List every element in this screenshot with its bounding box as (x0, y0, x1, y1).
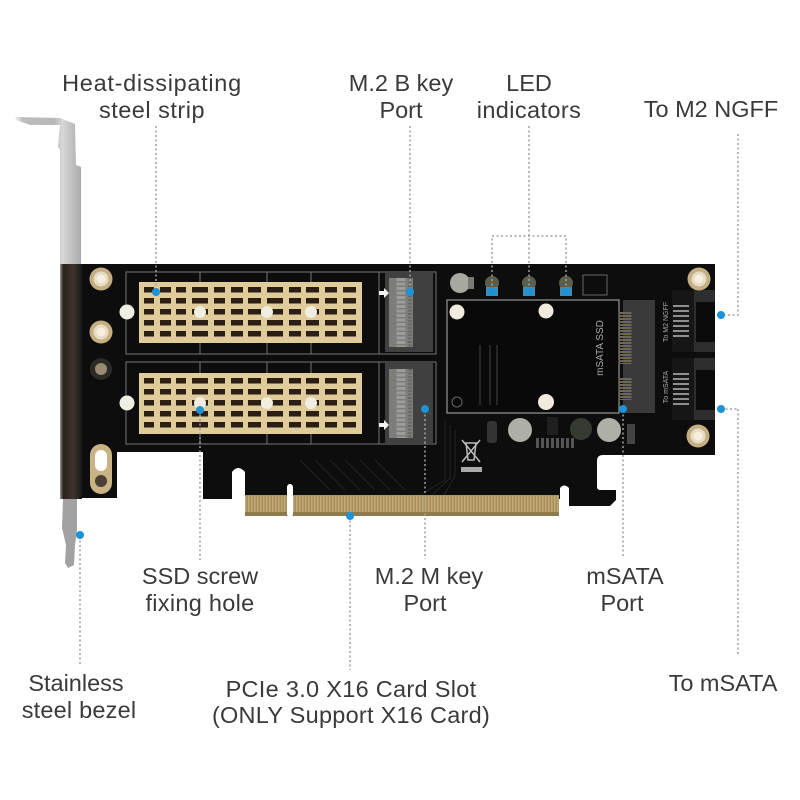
label: SSD screw fixing hole: SSD screw (142, 563, 259, 589)
SSD mounting outlines (126, 272, 436, 444)
label: M.2 B key port: Port (379, 97, 423, 123)
label: to mSATA: To mSATA (669, 670, 778, 696)
small header (583, 275, 607, 295)
label: stainless steel bezel: Stainless (28, 670, 124, 696)
label: PCIe card slot: PCIe 3.0 X16 Card Slot (226, 676, 477, 702)
heat-dissipating plates (139, 282, 362, 343)
label: SSD screw fixing hole: fixing hole (145, 590, 255, 616)
connector arrows (379, 288, 389, 430)
board traces (300, 420, 455, 495)
bracket screws and pads (90, 268, 112, 494)
gold edge connector (245, 484, 559, 517)
mSATA bay (447, 300, 655, 413)
stainless steel bracket (15, 117, 82, 568)
callout dots (76, 288, 725, 539)
recycling mark (461, 440, 482, 472)
capacitor top (450, 273, 474, 293)
label: M.2 M key port: M.2 M key (375, 563, 483, 589)
PCB board (82, 264, 715, 517)
label: stainless steel bezel: steel bezel (22, 697, 136, 723)
corner pads right (688, 268, 710, 290)
LEDs (485, 276, 573, 296)
M.2 connectors (385, 272, 433, 352)
plate mounting holes (120, 304, 317, 410)
SATA connectors (672, 290, 715, 352)
bottom components (487, 417, 635, 444)
label: mSATA port: mSATA (586, 563, 664, 589)
label: mSATA port: Port (600, 590, 644, 616)
label: LED indicators: LED (506, 70, 552, 96)
label: heat-dissipating steel strip: Heat-dissipating (62, 70, 242, 96)
label: heat-dissipating steel strip: steel strip (99, 97, 205, 123)
PCB board: To M2 NGFF (663, 302, 670, 342)
label: M.2 M key port: Port (403, 590, 447, 616)
label: to M2 NGFF: To M2 NGFF (644, 96, 778, 122)
label: PCIe card slot: (ONLY Support X16 Card) (212, 702, 490, 728)
callout leader lines (80, 126, 738, 670)
label: LED indicators: indicators (477, 97, 581, 123)
PCB board: To mSATA (663, 370, 670, 403)
label: M.2 B key port: M.2 B key (349, 70, 453, 96)
mSATA bay: mSATA SSD (595, 320, 606, 376)
